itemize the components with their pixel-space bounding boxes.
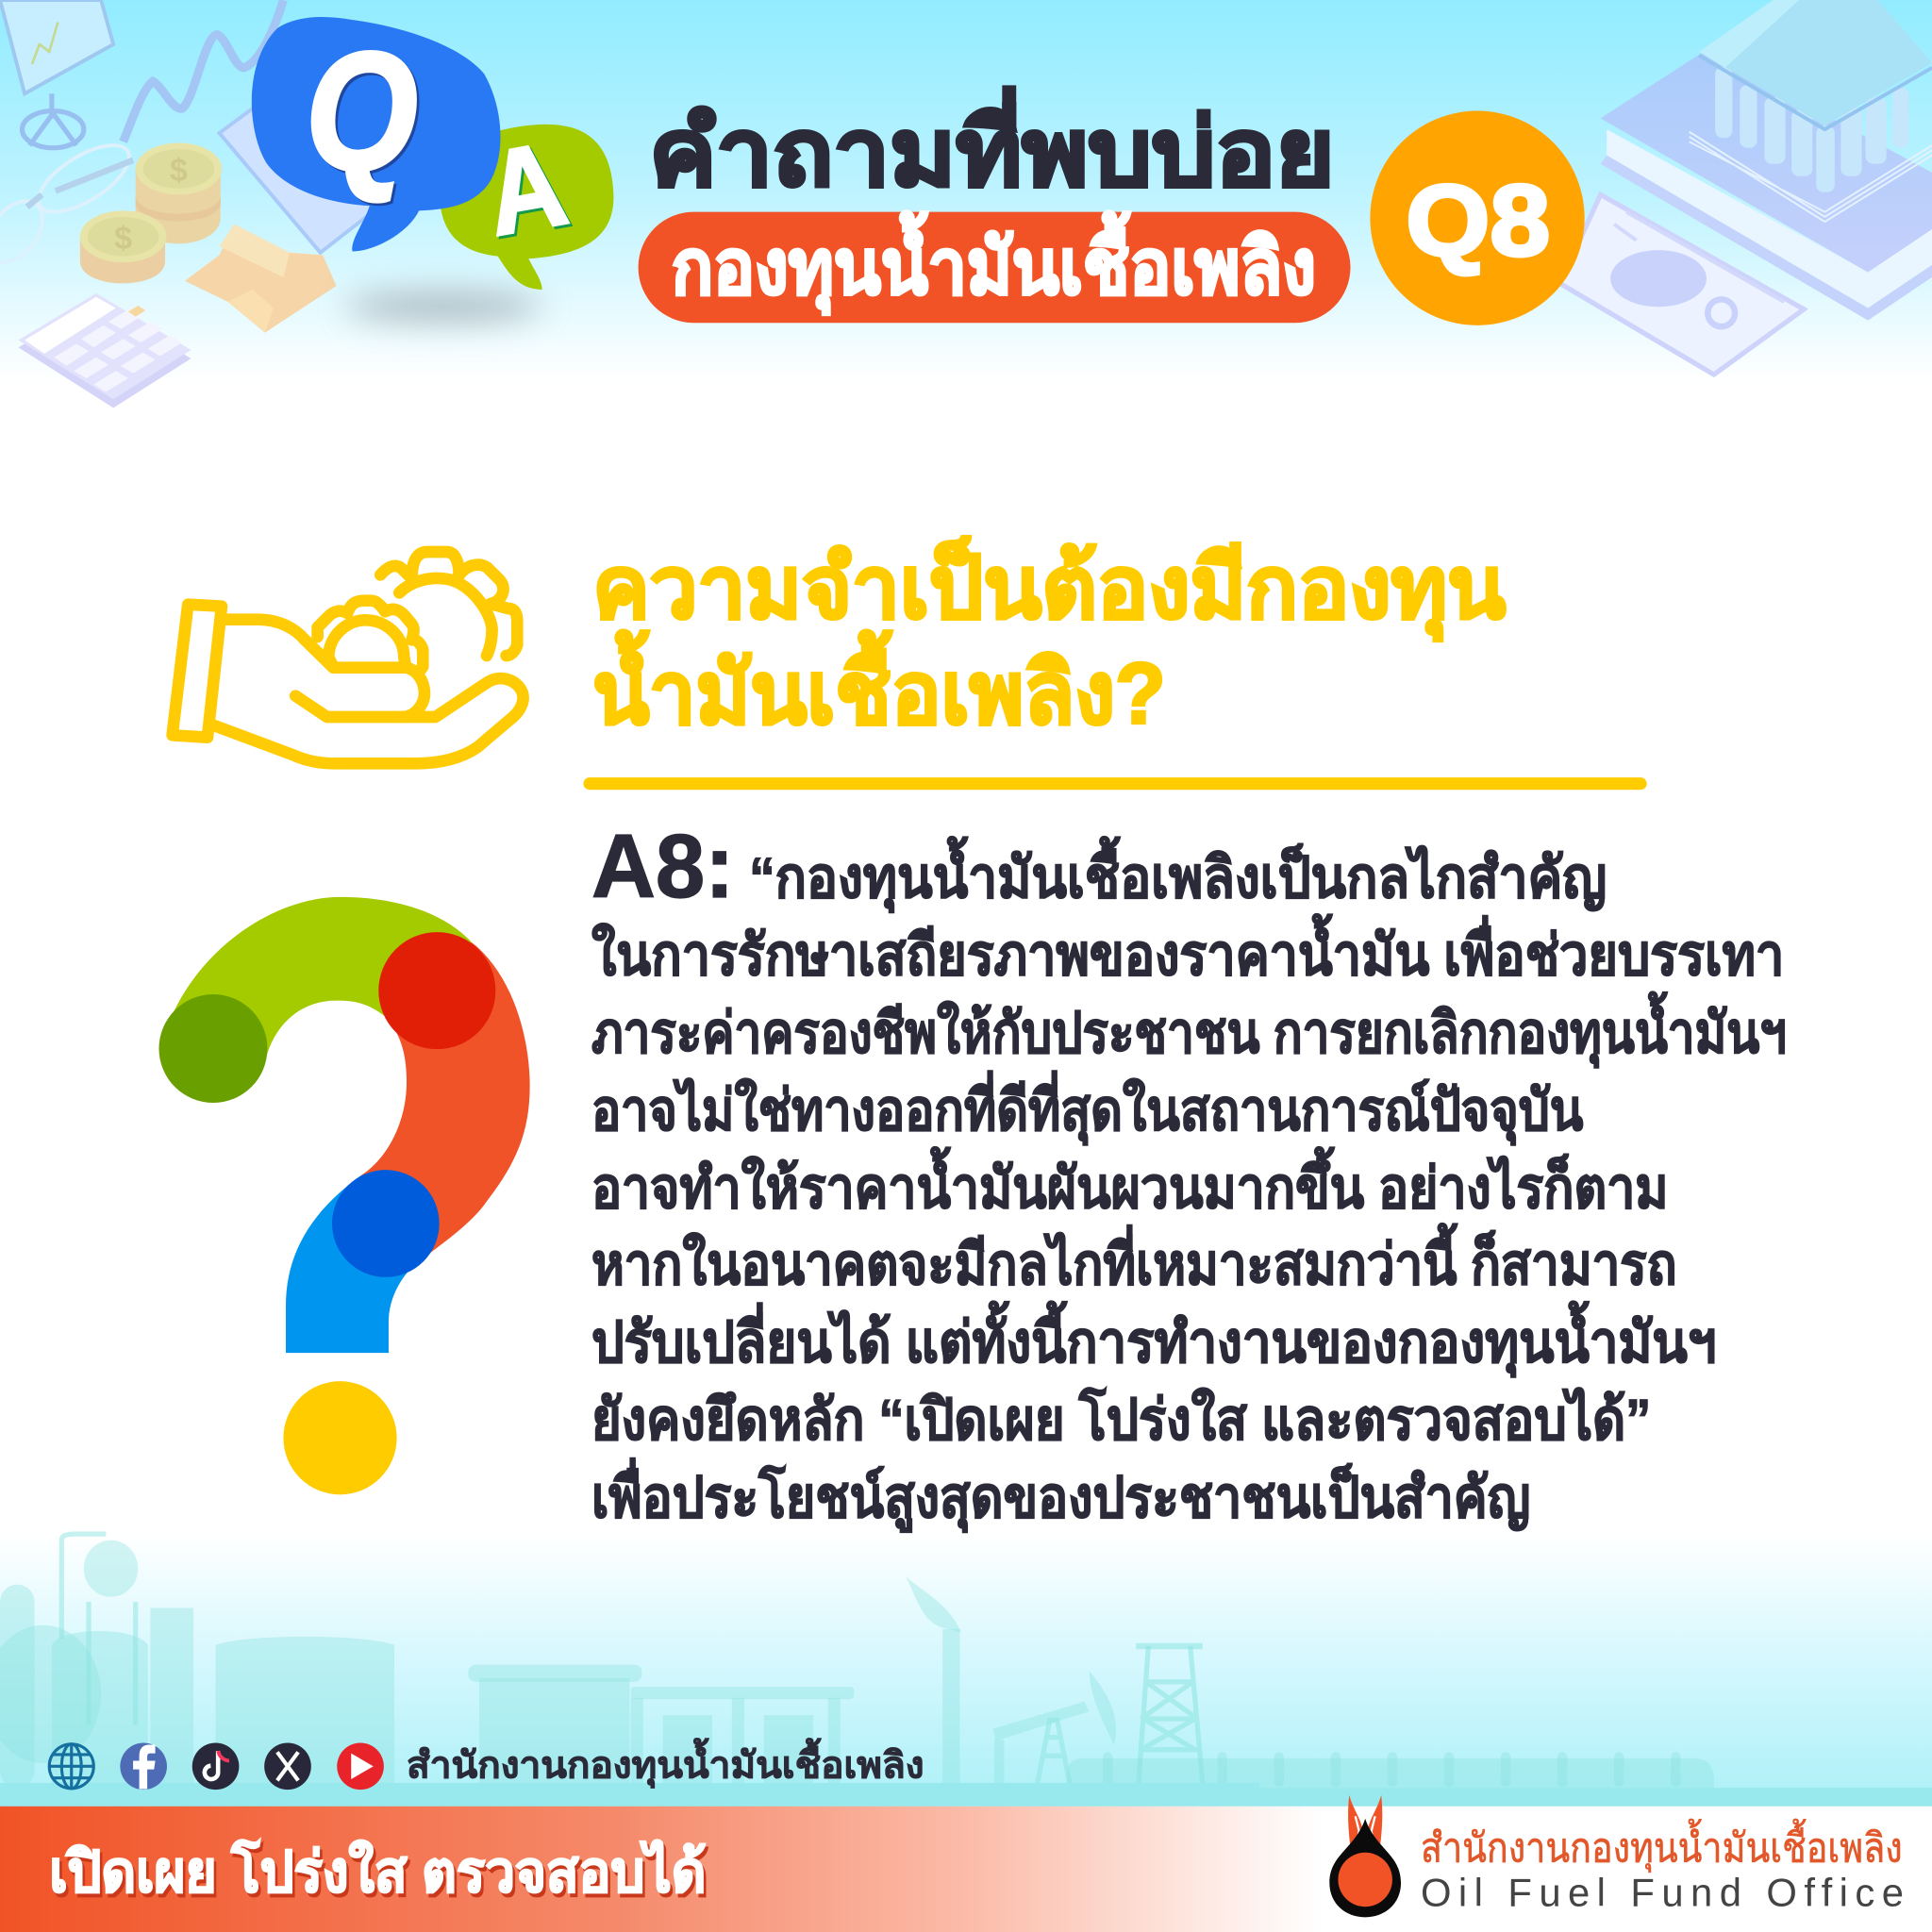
- decoration: bank and banknote right: [1560, 0, 1932, 375]
- icon: youtube play: [337, 1743, 384, 1790]
- answer line 8: ยังคงยึดหลัก “เปิดเผย โปร่งใส และตรวจสอบได้”: [591, 1387, 1651, 1452]
- icon: website globe: [49, 1743, 93, 1789]
- coin stacks: $: [114, 221, 132, 257]
- icon: question speech bubble: Q: [308, 21, 420, 208]
- title: คำถามที่พบบ่อย: [649, 87, 1335, 206]
- banknote: [1560, 194, 1804, 375]
- glasses: [0, 132, 140, 273]
- service station: [468, 1665, 854, 1789]
- answer line 2: ในการรักษาเสถียรภาพของราคาน้ำมัน เพื่อช่วยบรรเทา: [591, 913, 1784, 987]
- chart board: [0, 0, 113, 148]
- icon: x: [264, 1743, 311, 1790]
- line chart ribbon: [124, 0, 283, 142]
- answer line 5: อาจทำให้ราคาน้ำมันผันผวนมากขึ้น อย่างไรก็ตาม: [591, 1146, 1668, 1220]
- icon: answer speech bubble: A: [477, 118, 575, 260]
- subtitle pill: กองทุนน้ำมันเชื้อเพลิง: [672, 211, 1316, 315]
- decoration: finance illustration left: [0, 0, 375, 408]
- logo drop: [1329, 1819, 1401, 1917]
- icon: question speech bubble: Q: [306, 18, 418, 206]
- upper plate: [1601, 51, 1932, 273]
- derrick: [1136, 1646, 1203, 1783]
- answer line 7: ปรับเปลี่ยนได้ แต่ทั้งนี้การทำงานของกองทุนน้ำมันฯ: [591, 1300, 1716, 1377]
- icon: hand holding gears: [173, 552, 524, 763]
- calculator: [19, 293, 191, 408]
- flare stack: [906, 1576, 961, 1787]
- header background: [0, 0, 1932, 382]
- pillars: [1715, 67, 1908, 192]
- roof: [1699, 0, 1932, 125]
- coin stacks: [80, 143, 222, 283]
- storage tower: [0, 1534, 193, 1788]
- icon: question speech bubble: [252, 17, 500, 251]
- plate steps: [1690, 132, 1932, 222]
- answer body text: [591, 817, 1787, 1533]
- icon: answer speech bubble: A: [479, 120, 578, 263]
- icon: facebook: [120, 1743, 167, 1790]
- social media row: [49, 1739, 924, 1790]
- question heading: น้ำมันเชื้อเพลิง?: [592, 630, 1166, 742]
- answer label: A8:: [591, 817, 734, 917]
- logo text english: Oil Fuel Fund Office: [1421, 1871, 1904, 1915]
- pump jack: [993, 1671, 1116, 1783]
- decoration: refinery silhouette: [0, 1534, 1714, 1789]
- answer line 9: เพื่อประโยชน์สูงสุดของประชาชนเป็นสำคัญ: [591, 1457, 1530, 1533]
- shadow under speech bubbles: [345, 292, 542, 322]
- question number badge: [1370, 111, 1585, 325]
- icon: answer speech bubble: [440, 118, 613, 290]
- logo: Oil Fuel Fund Office: [1329, 1795, 1904, 1917]
- answer line 1: “กองทุนน้ำมันเชื้อเพลิงเป็นกลไกสำคัญ: [749, 836, 1607, 913]
- slogan: เปิดเผย โปร่งใส ตรวจสอบได้: [49, 1839, 706, 1904]
- question heading: [592, 535, 1506, 742]
- heading underline: [583, 777, 1647, 790]
- large tank: [216, 1637, 394, 1788]
- white base box: [1607, 129, 1932, 308]
- logo flame: [1348, 1795, 1382, 1848]
- answer line 6: หากในอนาคตจะมีกลไกที่เหมาะสมกว่านี้ ก็สามารถ: [591, 1223, 1677, 1296]
- social account name: สำนักงานกองทุนน้ำมันเชื้อเพลิง: [407, 1739, 924, 1789]
- ground strip: [0, 1783, 1932, 1807]
- subtitle pill: [639, 211, 1351, 323]
- lower plate: [1601, 156, 1932, 321]
- answer line 4: อาจไม่ใช่ทางออกที่ดีที่สุดในสถานการณ์ปัจจุบัน: [591, 1071, 1583, 1146]
- icon: multicolour question mark: [158, 897, 530, 1494]
- question number badge: Q8: [1406, 163, 1550, 276]
- footer band: [0, 1807, 1932, 1932]
- bottom background: [0, 1534, 1932, 1807]
- tablet: [219, 108, 375, 253]
- gold bars: [185, 225, 337, 333]
- pipeline: [1067, 1752, 1714, 1788]
- slogan: เปิดเผย โปร่งใส ตรวจสอบได้: [52, 1842, 708, 1907]
- question heading: ความจำเป็นต้องมีกองทุน: [592, 535, 1506, 641]
- icon: tiktok: [192, 1743, 239, 1790]
- coin stacks: $: [170, 153, 188, 189]
